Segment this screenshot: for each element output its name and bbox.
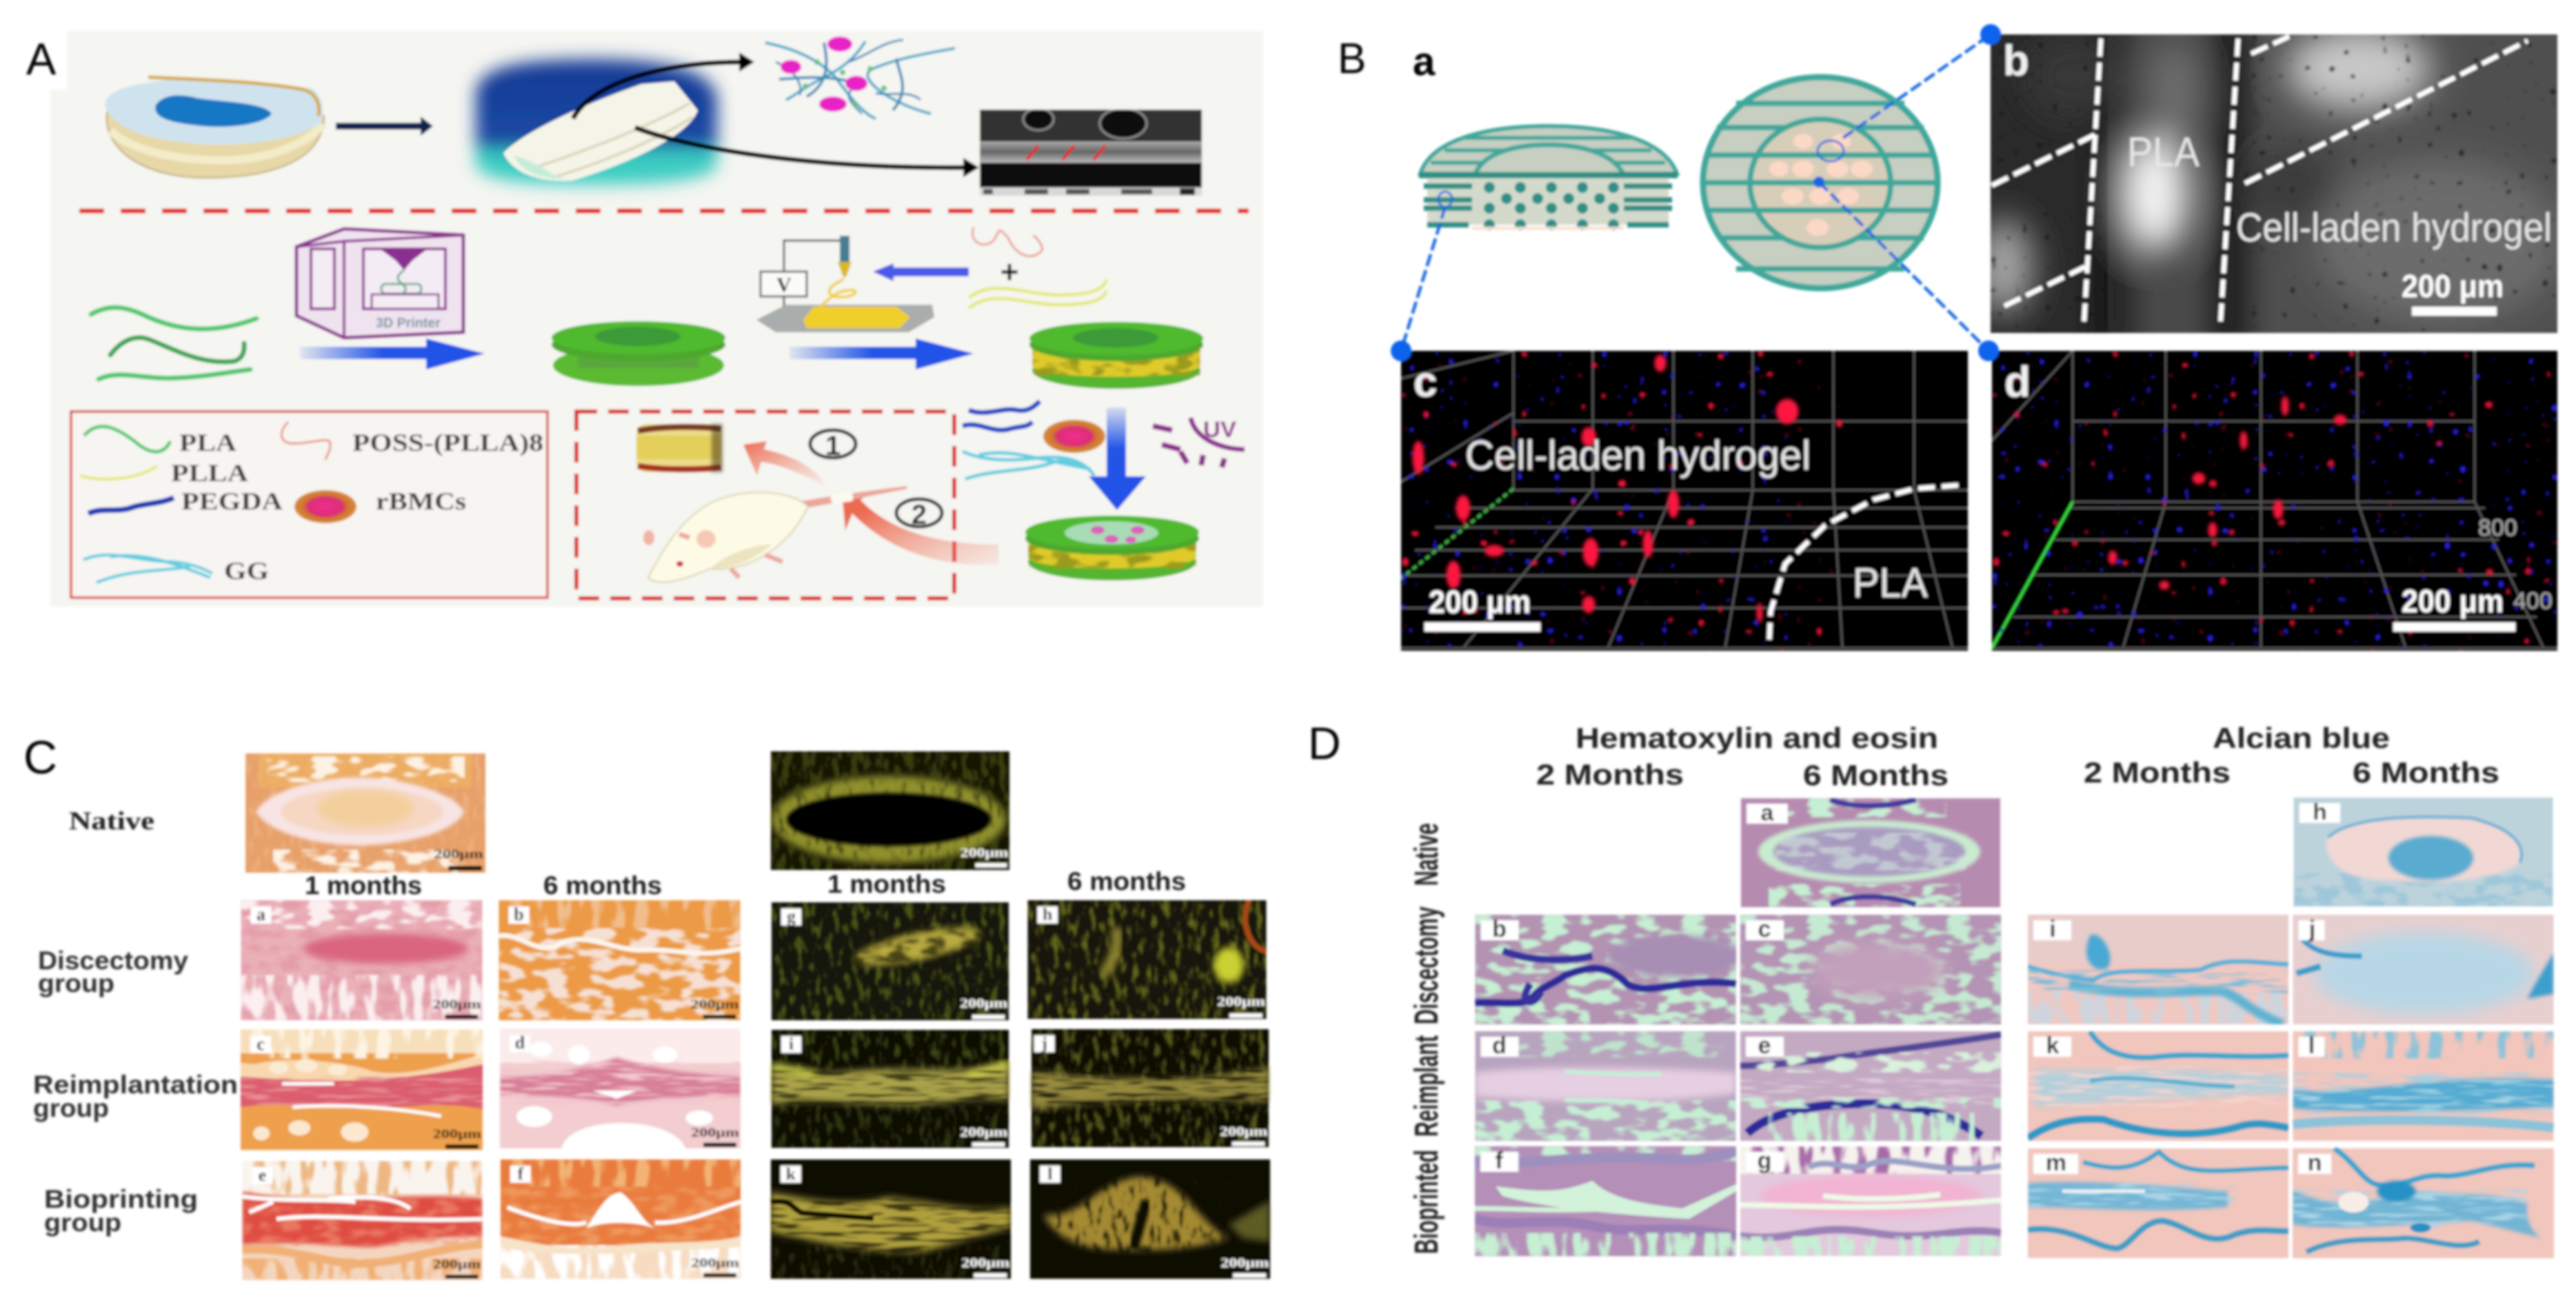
C e: 200μm bbox=[433, 1257, 481, 1272]
rotated row labels: Native bbox=[1409, 823, 1445, 886]
SEM micrograph bbox=[978, 108, 1204, 197]
panel C: histology, Sirius red and polarised light bbox=[23, 731, 1270, 1280]
implantation dashed box bbox=[576, 412, 954, 598]
staining headings: Alcian blue bbox=[2213, 722, 2390, 754]
row label Discectomy group: Discectomy bbox=[38, 946, 188, 975]
label d: d bbox=[2004, 358, 2031, 406]
legend: PLLA: PLLA bbox=[171, 459, 248, 487]
row label Reimplantation group: Reimplantation bbox=[33, 1071, 238, 1099]
arrow: polymer feed bbox=[873, 263, 969, 281]
divider: red dashed line bbox=[79, 208, 1249, 214]
arrow: to hydrogel network bbox=[573, 52, 754, 119]
C b: 200μm bbox=[691, 997, 739, 1012]
icon: hydrogel network with cells bbox=[765, 37, 955, 119]
C l: 200μm bbox=[1220, 1256, 1269, 1270]
C f: 200μm bbox=[691, 1256, 739, 1270]
legend: POSS-(PLLA)8 bbox=[281, 422, 543, 460]
C f bbox=[499, 1157, 743, 1280]
axis tick labels: 400 bbox=[2513, 588, 2553, 614]
C h: h bbox=[1043, 904, 1052, 924]
C h: 200μm bbox=[1217, 995, 1265, 1009]
D c: c bbox=[1758, 916, 1771, 942]
icon: PLLA strands bbox=[969, 280, 1107, 308]
row label Reimplantation group: group bbox=[33, 1094, 109, 1122]
row label Native: Native bbox=[69, 807, 154, 835]
axis tick labels: 800 bbox=[2478, 515, 2517, 541]
C i bbox=[768, 1028, 1012, 1150]
legend: rBMCs cell bbox=[294, 487, 466, 523]
time-point headings: 6 Months bbox=[1803, 759, 1949, 791]
D b bbox=[1473, 913, 1738, 1026]
C native bright-field: 200μm bbox=[434, 847, 483, 862]
C f: f bbox=[518, 1164, 524, 1184]
legend: rBMCs cell: rBMCs bbox=[376, 487, 466, 515]
D l: l bbox=[2308, 1033, 2315, 1059]
column headings: 6 months bbox=[543, 871, 662, 900]
staining headings: Hematoxylin and eosin bbox=[1576, 722, 1938, 754]
label c: c bbox=[1413, 358, 1437, 406]
C b bbox=[496, 898, 742, 1022]
C j bbox=[1028, 1027, 1272, 1149]
icon: POSS-(PLLA)8 squiggle bbox=[973, 227, 1043, 256]
panel B: bioprinted construct imaging bbox=[1338, 14, 2563, 651]
icon: half-dome construct bbox=[1419, 126, 1678, 230]
micrograph c bbox=[1399, 349, 1970, 653]
icon: top-view construct bbox=[1703, 77, 1938, 288]
legend: PEGDA bbox=[88, 487, 283, 515]
scale bar b: 200 μm bbox=[2402, 268, 2504, 304]
legend box bbox=[71, 412, 547, 598]
column headings bbox=[305, 867, 1186, 900]
C d: d bbox=[515, 1033, 525, 1053]
icon: final cell-laden construct bbox=[1025, 516, 1199, 580]
D l bbox=[2293, 1031, 2554, 1141]
panel letter B: B bbox=[1338, 35, 1366, 83]
icon: rat bbox=[643, 486, 907, 582]
D h bbox=[2292, 796, 2555, 909]
callout connector lines bbox=[1401, 34, 1991, 351]
C l bbox=[1028, 1157, 1273, 1281]
D a bbox=[1739, 796, 2002, 909]
D h: h bbox=[2313, 799, 2327, 825]
C j: j bbox=[1040, 1033, 1047, 1053]
label hydrogel: Cell-laden hydrogel bbox=[1465, 432, 1811, 478]
plus sign: + bbox=[1000, 254, 1018, 290]
panel A background bbox=[50, 31, 1263, 607]
sub-panel letter a: a bbox=[1413, 39, 1436, 84]
D m: m bbox=[2046, 1150, 2066, 1176]
D d bbox=[1476, 1031, 1736, 1141]
arrow: hydrogel encapsulation step bbox=[1089, 407, 1146, 510]
arrow: disc to scaffold bbox=[336, 116, 433, 136]
D a: a bbox=[1761, 800, 1774, 826]
micrograph b bbox=[1989, 32, 2559, 335]
D g bbox=[1740, 1146, 2001, 1256]
D j: j bbox=[2308, 916, 2315, 942]
time-point headings: 6 Months bbox=[2353, 756, 2499, 789]
micrograph d bbox=[1990, 349, 2559, 653]
D n: n bbox=[2308, 1150, 2322, 1176]
icon: natural disc bbox=[105, 77, 324, 178]
C a: 200μm bbox=[433, 997, 481, 1012]
time-point headings: 2 Months bbox=[2084, 756, 2231, 789]
arrow: to SEM image bbox=[635, 128, 979, 177]
D j bbox=[2293, 915, 2554, 1024]
time-point headings bbox=[1536, 756, 2499, 791]
column headings: 1 months bbox=[827, 870, 946, 898]
D g: g bbox=[1758, 1148, 1771, 1174]
icon: electrospinning rig: V bbox=[776, 274, 792, 296]
C a: a bbox=[256, 904, 265, 924]
icon: UV lamp bbox=[1153, 417, 1245, 467]
arrow: step 2 implantation bbox=[843, 491, 998, 565]
D b: b bbox=[1492, 916, 1507, 942]
arrow: printing step bbox=[300, 338, 485, 369]
D k: k bbox=[2046, 1033, 2060, 1059]
panel D: histology, H&E and Alcian blue bbox=[1308, 718, 2554, 1258]
staining headings bbox=[1576, 722, 2390, 754]
C l: l bbox=[1047, 1164, 1052, 1184]
icon: green printed scaffold bbox=[552, 321, 725, 386]
rotated row labels bbox=[1409, 823, 1445, 1254]
scale bar d: 200 μm bbox=[2402, 583, 2504, 619]
UV text: UV bbox=[1203, 417, 1237, 442]
C c: 200μm bbox=[433, 1127, 481, 1142]
D i: i bbox=[2049, 916, 2056, 942]
C h bbox=[1026, 898, 1269, 1021]
C i: 200μm bbox=[960, 1125, 1008, 1139]
D n bbox=[2293, 1148, 2554, 1258]
step marker 2: 2 bbox=[912, 500, 927, 530]
C native polarised: 200μm bbox=[960, 846, 1008, 860]
C g: 200μm bbox=[960, 996, 1008, 1011]
rotated row labels: Reimplant bbox=[1409, 1035, 1445, 1137]
C k: 200μm bbox=[961, 1256, 1009, 1270]
C a bbox=[239, 899, 484, 1022]
icon: PLA strands bbox=[91, 307, 256, 379]
label PLA: PLA bbox=[1853, 560, 1928, 606]
C i: i bbox=[789, 1033, 794, 1053]
C b: b bbox=[514, 904, 524, 924]
D c bbox=[1739, 913, 2002, 1026]
C k: k bbox=[786, 1164, 796, 1184]
icon: rBMC cell bbox=[1043, 420, 1105, 453]
column headings: 6 months bbox=[1067, 867, 1186, 895]
C e bbox=[240, 1159, 484, 1282]
C native bright-field bbox=[243, 751, 487, 875]
rotated row labels: Bioprinted bbox=[1409, 1150, 1445, 1254]
D i bbox=[2028, 915, 2288, 1024]
arrow: step 1 retrieval bbox=[743, 441, 826, 486]
D d: d bbox=[1492, 1033, 1507, 1059]
C c: c bbox=[256, 1034, 265, 1054]
row label Reimplantation group bbox=[33, 1071, 238, 1122]
D e bbox=[1740, 1031, 2001, 1141]
C g bbox=[769, 900, 1011, 1022]
legend: PLA: PLA bbox=[179, 429, 237, 456]
icon: scaffold with PLLA fibre layer bbox=[1029, 322, 1203, 389]
legend: GG bbox=[83, 555, 269, 585]
column headings: 1 months bbox=[305, 871, 422, 900]
C j: 200μm bbox=[1220, 1124, 1268, 1139]
icon: 3D printer bbox=[296, 229, 463, 338]
C c bbox=[239, 1029, 485, 1152]
D e: e bbox=[1758, 1033, 1771, 1059]
icon: GG strands bbox=[963, 452, 1094, 479]
D f: f bbox=[1495, 1148, 1503, 1174]
panel A: fabrication schematic bbox=[26, 31, 1263, 607]
panel letter D: D bbox=[1308, 718, 1341, 769]
arrow: electrospinning step bbox=[789, 338, 974, 369]
D m bbox=[2028, 1148, 2288, 1258]
scale bar c: 200 μm bbox=[1429, 584, 1531, 620]
step marker 1: 1 bbox=[825, 431, 841, 461]
legend: PLA bbox=[84, 427, 237, 456]
icon: electrospinning rig bbox=[756, 236, 934, 332]
legend: POSS-(PLLA)8: POSS-(PLLA)8 bbox=[352, 429, 543, 456]
rotated row labels: Discectomy bbox=[1409, 906, 1445, 1024]
time-point headings: 2 Months bbox=[1536, 758, 1684, 791]
label PLA: PLA bbox=[2127, 129, 2200, 175]
C d bbox=[498, 1029, 742, 1150]
row label Bioprinting group: Bioprinting bbox=[44, 1185, 198, 1213]
C g: g bbox=[787, 906, 796, 926]
C native polarised bbox=[768, 749, 1012, 872]
panel letter A: A bbox=[26, 34, 57, 84]
D k bbox=[2028, 1031, 2288, 1141]
legend: GG: GG bbox=[224, 557, 269, 585]
icon: retrieved motion segment bbox=[636, 424, 723, 472]
axis tick labels bbox=[2478, 515, 2553, 614]
row label Bioprinting group bbox=[44, 1185, 198, 1237]
step marker 1 bbox=[810, 430, 856, 461]
blue callout dots bbox=[1391, 24, 2001, 361]
legend: PEGDA: PEGDA bbox=[181, 487, 283, 515]
printer label: 3D Printer bbox=[376, 316, 441, 331]
row label Discectomy group: group bbox=[38, 969, 114, 997]
icon: PEGDA strands bbox=[963, 401, 1040, 430]
icon: engineered disc on blue backdrop bbox=[476, 59, 717, 185]
PLA boundary bbox=[1769, 485, 1958, 640]
row label Bioprinting group: group bbox=[44, 1208, 121, 1237]
row label Discectomy group bbox=[38, 946, 188, 997]
step marker 2 bbox=[896, 499, 942, 530]
panel letter C: C bbox=[23, 731, 57, 784]
C k bbox=[768, 1157, 1014, 1281]
D f bbox=[1475, 1146, 1736, 1256]
scale bar d bbox=[2393, 583, 2515, 631]
C d: 200μm bbox=[691, 1126, 739, 1140]
C e: e bbox=[259, 1165, 266, 1185]
legend: PLLA bbox=[80, 459, 248, 487]
label b: b bbox=[2003, 37, 2029, 85]
